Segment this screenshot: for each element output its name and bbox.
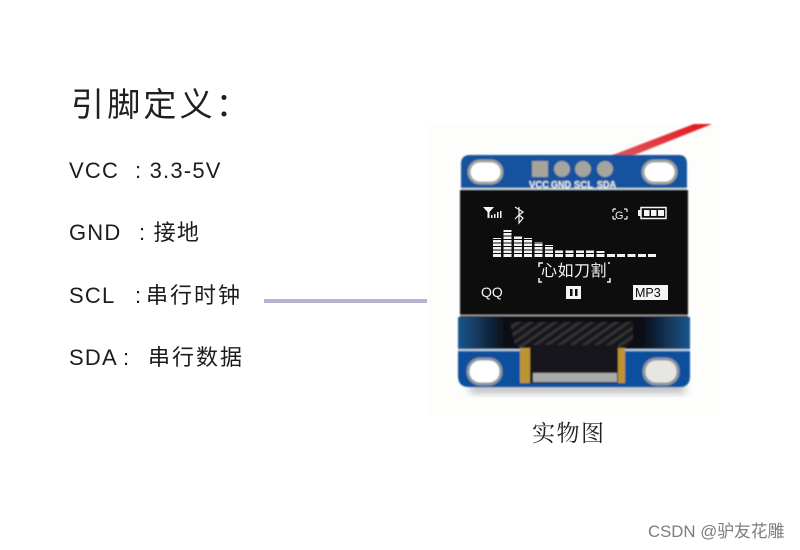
icon: G frame: G bbox=[615, 210, 624, 222]
board shadow bbox=[470, 384, 685, 393]
ribbon cable bbox=[510, 322, 633, 352]
pin pads bbox=[532, 161, 548, 177]
photo caption: 实物图 bbox=[532, 421, 606, 446]
pin: SCL: SCL bbox=[69, 283, 115, 308]
red wire bbox=[610, 124, 712, 156]
pin: SDA: SDA bbox=[69, 345, 118, 370]
pin labels: VCC bbox=[529, 180, 549, 191]
icon: pause bbox=[566, 286, 581, 299]
screen content bbox=[481, 207, 668, 300]
pin definition list bbox=[69, 158, 244, 370]
screen content: MP3 bbox=[635, 286, 661, 300]
watermark: CSDN @驴友花雕 bbox=[648, 522, 785, 541]
icon: bluetooth bbox=[515, 207, 523, 223]
pin: SCL: : bbox=[135, 283, 142, 308]
pin labels: SDA bbox=[597, 180, 616, 191]
pin: SDA: : bbox=[123, 345, 130, 370]
display glass bbox=[460, 190, 688, 317]
title: 引脚定义： bbox=[71, 86, 252, 123]
photo: OLED module bbox=[427, 124, 721, 416]
icon: signal bbox=[483, 207, 494, 218]
pin: GND: GND bbox=[69, 220, 122, 245]
icon: battery bbox=[641, 208, 666, 218]
label: QQ: QQ bbox=[481, 284, 503, 300]
equalizer row gaps bbox=[492, 232, 612, 254]
connector line bbox=[264, 299, 427, 303]
screen song title: 心如刀割 bbox=[541, 262, 607, 280]
bottom board section bbox=[458, 317, 690, 387]
pin labels: SCL bbox=[574, 180, 593, 191]
label: MP3 bbox=[633, 285, 668, 300]
pin labels bbox=[529, 180, 616, 191]
equalizer bars bbox=[493, 230, 656, 257]
top mounting holes bbox=[469, 161, 502, 183]
pin: SDA: 串行数据 bbox=[148, 345, 244, 370]
top board section bbox=[458, 155, 690, 387]
pin: SCL: 串行时钟 bbox=[146, 283, 242, 308]
pin labels: GND bbox=[551, 180, 571, 191]
pin: VCC: : 3.3-5V bbox=[135, 158, 222, 183]
pin: VCC: VCC bbox=[69, 158, 119, 183]
pin: GND: : 接地 bbox=[139, 220, 200, 245]
bottom mounting holes bbox=[468, 359, 501, 384]
